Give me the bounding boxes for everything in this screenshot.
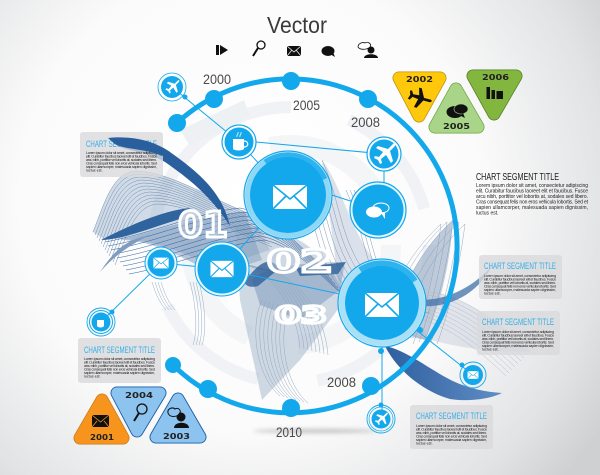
text block: chart segment top right: CHART SEGMENT TITLE xyxy=(476,172,559,183)
icon: coffee xyxy=(222,125,256,159)
title: Vector xyxy=(267,12,327,38)
panel: chart segment lower left: Lorem ipsum dolor sit amet, consectetur adipiscing xyxy=(84,357,155,361)
text block: chart segment top right: arcu nibh, porttitor vel lobortis at, sodales sed libero. xyxy=(476,194,588,200)
badge: 2003: 2003 xyxy=(163,432,190,441)
panel: chart segment right 2: Lorem ipsum dolor sit amet, consectetur adipiscing xyxy=(482,330,554,334)
icon: mail xyxy=(287,46,301,56)
panel: chart segment right 1: sapien ullamcorper, malesuada sapien dignissim, xyxy=(484,288,556,292)
panel: chart segment lower left: arcu nibh, porttitor vel lobortis at, sodales sed libero. xyxy=(84,364,155,368)
panel: chart segment upper left: Lorem ipsum dolor sit amet, consectetur adipiscing xyxy=(86,151,157,155)
ribbon right xyxy=(420,266,492,306)
text block: chart segment top right xyxy=(476,172,589,216)
dark ribbon center xyxy=(244,262,346,287)
panel: chart segment bottom: CHART SEGMENT TITLE xyxy=(416,411,487,421)
panel: chart segment upper left: luctus est. xyxy=(86,168,103,172)
wave ribbons and line mesh xyxy=(93,137,530,403)
panel: chart segment bottom: luctus est. xyxy=(416,442,433,446)
text block: chart segment top right: Lorem ipsum dolor sit amet, consectetur adipiscing xyxy=(476,183,588,189)
section numbers: 03 xyxy=(275,303,327,329)
year labels: 2000 xyxy=(203,71,231,87)
panel: chart segment bottom: arcu nibh, porttitor vel lobortis at, sodales sed libero. xyxy=(416,431,487,435)
panel: chart segment bottom: elit. Curabitur faucibus laoreet elit et faucibus. Fusce xyxy=(416,428,487,432)
panel: chart segment lower left: Cras consequat felis non eros vehicula lobortis. Sed xyxy=(84,368,155,372)
badge: 2002: 2002 xyxy=(406,75,433,84)
icon: small mail right xyxy=(460,362,486,388)
section numbers: 01 xyxy=(178,205,228,246)
text block: chart segment top right: Cras consequat felis non eros vehicula lobortis. Sed et xyxy=(476,200,589,206)
panel: chart segment lower left xyxy=(78,338,161,383)
panel: chart segment right 1: Lorem ipsum dolor sit amet, consectetur adipiscing xyxy=(484,274,556,278)
icon: small cup bottom left xyxy=(87,308,115,336)
badge: 2004: 2004 xyxy=(125,391,153,400)
panel: chart segment right 1: luctus est. xyxy=(484,292,501,296)
ground shadow xyxy=(253,429,377,433)
timeline ring xyxy=(165,72,457,417)
panel: chart segment right 2: elit. Curabitur faucibus laoreet elit et faucibus. Fusce xyxy=(482,334,554,338)
icon: plane circle xyxy=(367,137,401,171)
icon: speech bubble xyxy=(322,46,335,57)
panel: chart segment lower left: sapien ullamcorper, malesuada sapien dignissim, xyxy=(84,371,155,375)
panel: chart segment right 1: elit. Curabitur faucibus laoreet elit et faucibus. Fusce xyxy=(484,278,556,282)
panel: chart segment upper left: Cras consequat felis non eros vehicula lobortis. Sed xyxy=(86,162,157,166)
section numbers: 02 xyxy=(267,244,333,280)
section numbers xyxy=(178,205,333,329)
panel: chart segment right 2: CHART SEGMENT TITLE xyxy=(482,317,554,327)
panel: chart segment right 2: luctus est. xyxy=(482,348,499,352)
panel: chart segment lower left: luctus est. xyxy=(84,374,101,378)
year labels: 2008 xyxy=(351,114,380,130)
panel: chart segment bottom: sapien ullamcorper, malesuada sapien dignissim, xyxy=(416,438,487,442)
lower left tail xyxy=(100,235,150,272)
text block: chart segment top right: elit. Curabitur faucibus laoreet elit et faucibus. Fusce xyxy=(476,188,588,194)
panel: chart segment bottom: Lorem ipsum dolor sit amet, consectetur adipiscing xyxy=(416,424,487,428)
badge: 2001 xyxy=(80,400,123,442)
badge: 2006 xyxy=(473,73,516,114)
panel: chart segment upper left: CHART SEGMENT TITLE xyxy=(86,139,157,149)
panel: chart segment right 1: CHART SEGMENT TITLE xyxy=(484,261,556,271)
toolbar icons xyxy=(216,41,378,58)
connector lines xyxy=(101,87,473,419)
badge: 2006: 2006 xyxy=(482,73,509,82)
panel: chart segment upper left: arcu nibh, porttitor vel lobortis at, sodales sed libero. xyxy=(86,158,157,162)
text block: chart segment top right: sapien ullamcorper, malesuada sapien dignissim, xyxy=(476,205,588,211)
badge: 2004 xyxy=(117,391,160,431)
dark ribbon upper left xyxy=(108,137,230,226)
panel: chart segment upper left xyxy=(80,132,163,177)
badge: 2001: 2001 xyxy=(90,433,114,442)
icon: user with cloud xyxy=(358,42,378,58)
badge: 2002 xyxy=(399,75,440,116)
panel: chart segment right 2: Cras consequat felis non eros vehicula lobortis. Sed xyxy=(482,340,554,344)
dark ribbon left xyxy=(101,208,190,240)
panel: chart segment bottom: Cras consequat felis non eros vehicula lobortis. Sed xyxy=(416,434,487,438)
backdrop rings xyxy=(153,100,429,383)
panel: chart segment lower left: elit. Curabitur faucibus laoreet elit et faucibus. Fusce xyxy=(84,360,155,364)
circle: small message left xyxy=(145,247,177,279)
panel: chart segment upper left: sapien ullamcorper, malesuada sapien dignissim, xyxy=(86,165,157,169)
badge: 2005 xyxy=(435,89,478,131)
panel: chart segment right 1 xyxy=(479,255,562,299)
icon: magnifier xyxy=(253,41,265,56)
circle: message 2 xyxy=(195,242,249,296)
timeline nodes xyxy=(165,72,380,417)
icon: small plane bottom xyxy=(367,405,395,433)
panel: chart segment bottom xyxy=(410,405,493,449)
circle: chat xyxy=(350,182,406,238)
circle: message 1 xyxy=(244,151,332,239)
year labels: 2010 xyxy=(276,424,302,440)
panel: chart segment right 2: sapien ullamcorper, malesuada sapien dignissim, xyxy=(482,344,554,348)
badge: 2003 xyxy=(156,399,200,441)
circle: message 3 xyxy=(338,259,426,347)
ribbon lower right xyxy=(385,346,502,400)
badge: 2005: 2005 xyxy=(443,122,470,131)
panel: chart segment right 2 xyxy=(477,311,560,355)
icon: play xyxy=(216,45,228,55)
panel: chart segment lower left: CHART SEGMENT TITLE xyxy=(84,345,155,355)
panel: chart segment right 1: Cras consequat felis non eros vehicula lobortis. Sed xyxy=(484,284,556,288)
year labels: 2008 xyxy=(327,374,356,390)
panel: chart segment upper left: elit. Curabitur faucibus laoreet elit et faucibus. Fusce xyxy=(86,154,157,158)
year labels xyxy=(203,71,380,440)
panel: chart segment right 1: arcu nibh, porttitor vel lobortis at, sodales sed libero. xyxy=(484,281,556,285)
icon: plane top left xyxy=(158,73,186,101)
text block: chart segment top right: luctus est. xyxy=(476,210,499,216)
panel: chart segment right 2: arcu nibh, porttitor vel lobortis at, sodales sed libero. xyxy=(482,337,554,341)
year labels: 2005 xyxy=(293,97,320,113)
